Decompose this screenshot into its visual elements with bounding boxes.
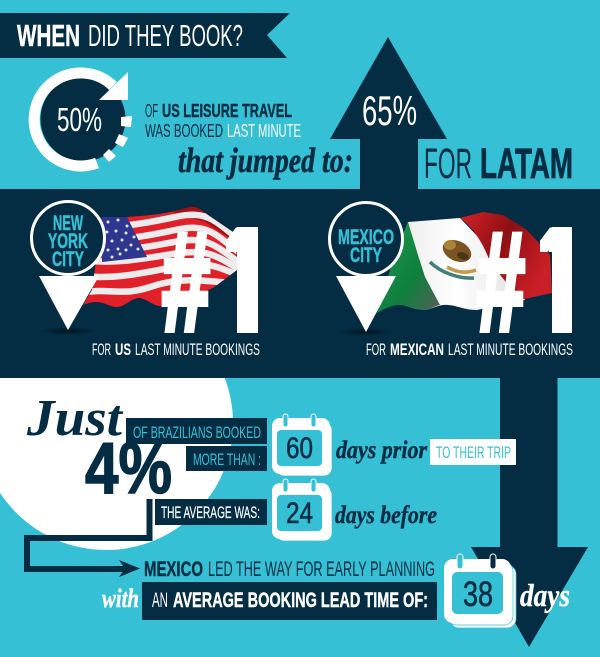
label: the average was: THE AVERAGE WAS:	[161, 503, 260, 522]
caption: US bookings: FOR	[92, 341, 111, 359]
connector arrow	[27, 499, 150, 577]
text: US leisure travel	[145, 101, 301, 141]
label: more than	[186, 446, 267, 471]
dark band	[0, 189, 600, 378]
script: that jumped to: that jumped to:	[178, 141, 353, 180]
text: Mexico led the way: LED THE WAY FOR EARLY PLANNING	[208, 558, 435, 581]
text: 1	[219, 198, 259, 361]
label: more than: MORE THAN :	[193, 450, 261, 469]
script: days before: days before	[335, 502, 437, 529]
title banner: DID THEY BOOK?	[88, 18, 243, 53]
caption: US bookings: LAST MINUTE BOOKINGS	[135, 341, 260, 359]
text: Mexico led the way: MEXICO	[144, 558, 203, 581]
number one US	[162, 227, 258, 333]
up arrow with 65%	[330, 37, 447, 190]
script: days prior: days prior	[336, 437, 427, 464]
caption: Mexican bookings: MEXICAN	[390, 341, 444, 359]
up arrow with 65%: 65%	[362, 87, 417, 134]
number one Mexico: #	[477, 203, 525, 360]
calendar: 38: 38	[463, 575, 493, 614]
text: Mexico led the way	[144, 558, 435, 581]
map pin: Mexico City: CITY	[350, 244, 382, 267]
title banner: WHEN	[17, 18, 80, 53]
label: the average was	[155, 499, 267, 525]
text: for LATAM: FOR	[424, 140, 472, 188]
icon: 50% circular arrow: 50%	[57, 101, 102, 138]
script: Just: Just	[26, 390, 124, 447]
icon: 50% circular arrow	[34, 72, 132, 166]
label: of Brazilians booked: OF BRAZILIANS BOOKED	[133, 423, 261, 442]
down arrow	[471, 377, 588, 647]
label: to their trip: TO THEIR TRIP	[436, 443, 511, 462]
text: for LATAM	[424, 140, 573, 188]
caption: Mexican bookings: FOR	[366, 341, 386, 359]
US flag	[83, 206, 237, 308]
text: US leisure travel: US LEISURE TRAVEL	[162, 101, 292, 121]
label: of Brazilians booked	[126, 418, 267, 444]
label: to their trip	[430, 439, 516, 465]
script: with: with	[102, 584, 139, 613]
calendar: 60: 60	[286, 432, 313, 465]
title banner	[0, 13, 290, 58]
label: average booking lead time: AN	[152, 589, 168, 612]
white circle backdrop	[0, 378, 233, 550]
script: days: days	[520, 577, 570, 613]
number one US: #	[162, 203, 210, 360]
label: average booking lead time	[142, 582, 437, 620]
label: average booking lead time: AVERAGE BOOKING LEAD TIME OF:	[173, 589, 428, 612]
number one Mexico	[477, 227, 572, 333]
caption: US bookings	[92, 341, 260, 359]
calendar: 24	[272, 479, 332, 541]
caption: US bookings: US	[115, 341, 131, 359]
map pin: New York City	[32, 202, 104, 335]
caption: Mexican bookings	[366, 341, 573, 359]
text: US leisure travel: OF	[145, 101, 158, 121]
Mexican flag	[377, 212, 552, 313]
stat: 4%: 4%	[85, 429, 172, 509]
text: US leisure travel: LAST MINUTE	[227, 121, 301, 141]
calendar: 38	[444, 554, 516, 628]
calendar: 24: 24	[286, 497, 313, 530]
map pin: New York City: CITY	[52, 248, 84, 271]
text: US leisure travel: WAS BOOKED	[145, 121, 223, 141]
map pin: Mexico City	[330, 202, 402, 336]
map pin: New York City: YORK	[48, 230, 88, 253]
map pin: New York City: NEW	[53, 212, 83, 235]
map pin: Mexico City: MEXICO	[338, 226, 394, 249]
calendar: 60	[272, 414, 332, 476]
